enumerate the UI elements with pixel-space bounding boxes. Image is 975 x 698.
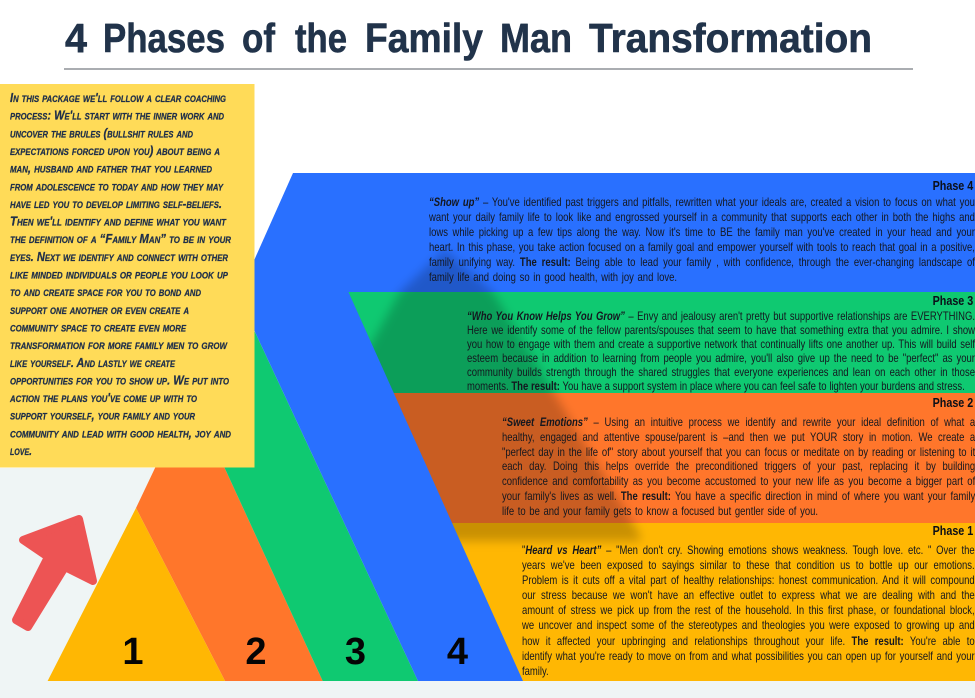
phase 2 text (502, 415, 975, 518)
title (65, 15, 872, 61)
phase 2 text: "perfect day in the life of" story about yourself that you can focus or meditate on by reading or listening to it (502, 445, 975, 459)
phase 4 text: “Show up” – You've identified past triggers and pitfalls, rewritten what your ideals are, created a vision to focus on what you (429, 195, 975, 209)
title: Phases (103, 15, 225, 61)
intro text (9, 90, 231, 458)
phase 3 text: you how to engage with them and create a supportive network that continually lifts one another up. This will build self (467, 337, 975, 351)
intro text: support one another or even create a (10, 302, 189, 317)
pyramid number 2: 2 (245, 631, 267, 673)
intro text: have led you to develop limiting self-beliefs. (10, 196, 222, 211)
title: of (242, 15, 275, 61)
intro text: the definition of a “Family Man” to be in your (10, 231, 231, 246)
pyramid number 3: 3 (345, 631, 366, 673)
phase 3 text: moments. The result: You have a support system in place where you can feel safe to lighten your burdens and stress. (467, 379, 965, 393)
title: Family (365, 15, 483, 61)
phase 1 text: we uncover and inspect some of the stereotypes and theologies you were exposed to growing up and (522, 618, 975, 632)
phase 1 label: Phase 1 (932, 524, 973, 538)
phase 3 label: Phase 3 (932, 294, 973, 308)
intro text: In this package we'll follow a clear coaching (10, 90, 226, 105)
phase 3 band (340, 292, 975, 393)
phase 2 text: your family's lives as well. The result: You have a specific direction in mind of where you want your family (502, 489, 975, 503)
phase 2 band (380, 393, 975, 523)
intro text: community space to create even more (10, 320, 187, 334)
phase 1 text: Problem is it cuts off a vital part of healthy relationships: honest communication. And it will compound (522, 573, 975, 587)
intro text: expectations forced upon you) about being a (10, 143, 220, 158)
intro text: man, husband and father that you learned (10, 161, 212, 176)
pyramid layer 1 yellow (48, 508, 225, 681)
phase 4 text: heart. In this phase, you take action focused on a family goal and empower yourself with tools to reach that goal in a positive, (429, 240, 975, 254)
phase 4 text: lows while picking up a few tips along the way. Now it's time to BE the family man you've created in your head and your (429, 225, 975, 239)
intro panel (0, 84, 254, 468)
phase 1 text: our stress because we won't have an effective outlet to express what we are dealing with and the (522, 588, 975, 602)
phase 3 text (467, 309, 975, 393)
phase 1 text: identify what you're ready to move on from and what possibilities you can open up for yourself and your (522, 649, 975, 663)
phase 1 text: how it affected your upbringing and relationships throughout your life. The result: You're able to (522, 634, 975, 648)
phase 2 text: life to be and your family gets to know a focused but gentler side of you. (502, 504, 818, 518)
phase 3 text: community builds strength through the shared struggles that everyone experiences and lean on each other in those (467, 365, 975, 379)
intro text: love. (10, 443, 32, 458)
phase 2 text: healthy, engaged and attentive spouse/parent is –and then we put YOUR story in motion. We create a (502, 430, 975, 444)
phase 3 text: Here we identify some of the fellow parents/spouses that seem to have that something extra that you admire. I show (467, 323, 975, 337)
phase 1 text (522, 543, 975, 678)
phase 4 text (429, 195, 975, 284)
phase 4 text: family unifying way. The result: Being able to lead your family , with confidence, through the ever-changing landscape of (429, 255, 975, 269)
phase 4 label: Phase 4 (932, 179, 973, 193)
phase 2 label: Phase 2 (932, 396, 973, 410)
phase 2 text: each day. Doing this helps override the preconditioned triggers of your past, replacing it by building (502, 459, 975, 473)
icon: red up arrow (16, 519, 93, 627)
intro text: uncover the brules (bullshit rules and (10, 125, 193, 140)
phase 1 text: years we've been exposed to sayings similar to these that condition us to bottle up our emotions. (522, 558, 975, 572)
title: Transformation (589, 15, 872, 61)
phase 2 text: “Sweet Emotions” – Using an intuitive process we identify and rewrite your ideal definition of what a (502, 415, 975, 429)
intro text: to and create space for you to bond and (10, 284, 201, 299)
pyramid layer 4 blue (240, 291, 523, 681)
intro text: opportunities for you to show up. We put into (10, 372, 229, 387)
phase 4 band (240, 173, 975, 292)
title: 4 (65, 15, 87, 61)
phase 2 text: confidence and comfortability as you become accustomed to your new life as you become a bigger part of (502, 474, 975, 488)
title: Man (500, 15, 572, 61)
intro text: like minded individuals or people you look up (10, 266, 229, 282)
pyramid number 4: 4 (447, 631, 468, 673)
intro text: eyes. Next we identify and connect with other (10, 249, 228, 264)
intro text: community and lead with good health, joy and (10, 425, 231, 440)
pyramid number 1: 1 (122, 631, 144, 673)
title: the (295, 15, 347, 61)
intro text: transformation for more family men to grow (10, 337, 228, 352)
pyramid shadow (340, 250, 640, 541)
intro text: Then we'll identify and define what you want (10, 214, 227, 229)
intro text: like yourself. And lastly we create (10, 355, 176, 370)
phase 4 text: family life and doing so in good health, with joy and love. (429, 270, 677, 284)
pyramid layer 2 orange (136, 460, 323, 681)
intro text: process: We'll start with the inner work and (10, 108, 224, 123)
pyramid layer 3 green (200, 300, 418, 681)
intro text: action the plans you've come up with to (9, 390, 197, 405)
phase 1 text: amount of stress we pick up from the rest of the household. In this first phase, or foundational block, (522, 603, 975, 617)
phase 3 text: esteem because in addition to learning from people you admire, you'll also give up the need to be "perfect" as your (467, 351, 975, 365)
intro text: from adolescence to today and how they may (10, 178, 224, 193)
phase 3 text: “Who You Know Helps You Grow” – Envy and jealousy aren't pretty but supportive relationships are EVERYTHING. (467, 309, 975, 323)
intro text: support yourself, your family and your (10, 408, 195, 423)
phase 1 text: family. (522, 664, 549, 678)
phase 1 text: "Heard vs Heart” – "Men don't cry. Showing emotions shows weakness. Tough love. etc. " Over the (522, 543, 975, 557)
phase 4 text: want your daily family life to look like and engrossed yourself in a community that supports each other in both the highs and (429, 210, 975, 224)
phase 1 band (440, 523, 975, 681)
